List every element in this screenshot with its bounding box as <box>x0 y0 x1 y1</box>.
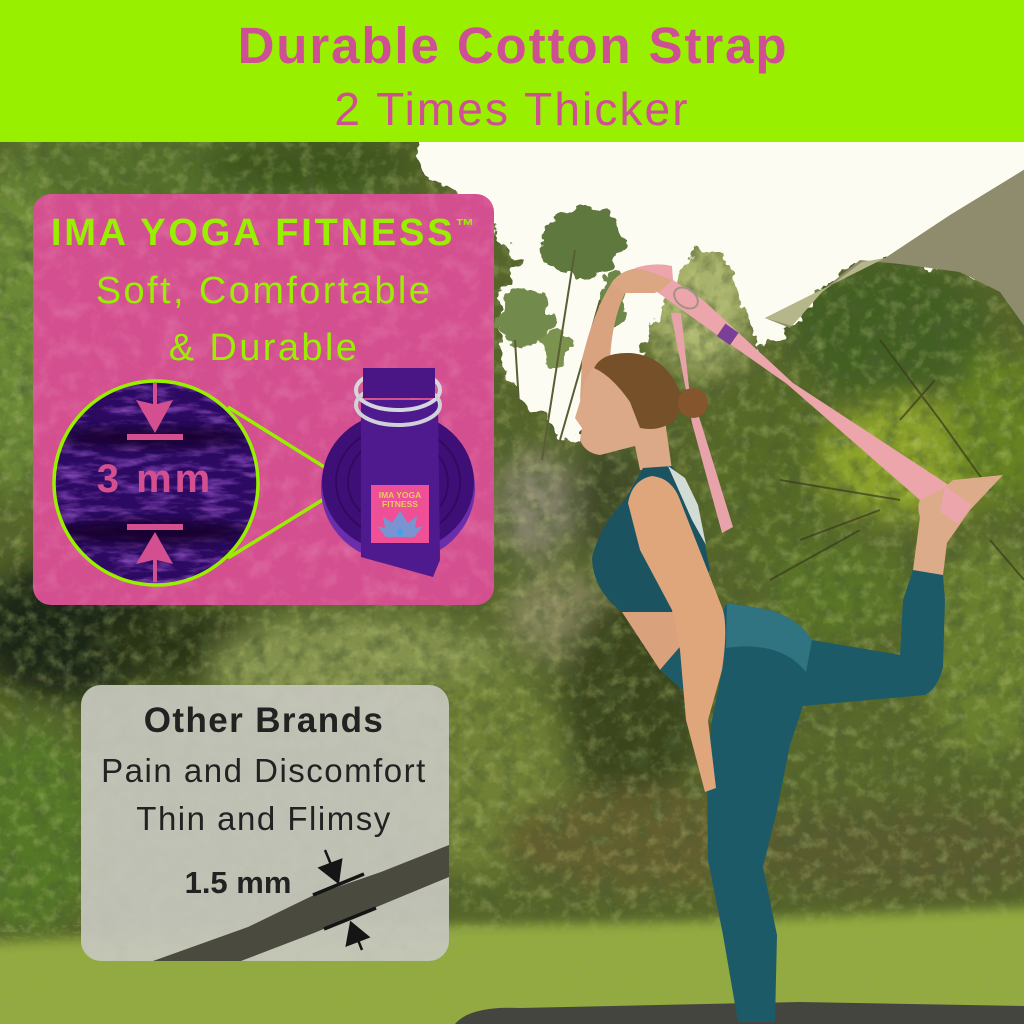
title: Durable Cotton Strap <box>238 17 788 74</box>
mountain <box>765 166 1024 334</box>
grass <box>0 905 1024 1024</box>
hair bun <box>678 388 708 418</box>
panel heading: IMA YOGA FITNESS <box>51 212 455 254</box>
panel text: Soft, Comfortable <box>96 270 432 312</box>
arm <box>628 476 725 792</box>
leggings <box>707 570 945 1022</box>
purple strap tag <box>717 324 739 345</box>
header banner <box>0 0 1024 142</box>
panel text: Pain and Discomfort <box>101 752 427 789</box>
panel heading: ™ <box>455 216 477 237</box>
panel text <box>101 752 427 837</box>
woman doing yoga with strap <box>575 264 1003 1022</box>
product label <box>371 485 429 543</box>
panel text <box>96 270 432 369</box>
face and neck <box>575 362 672 470</box>
sports top <box>592 466 710 612</box>
tree left of woman <box>499 207 624 370</box>
panel text: & Durable <box>169 327 359 369</box>
hand on strap <box>612 269 672 293</box>
thickness label: 1.5 mm <box>185 865 291 900</box>
strap band <box>635 264 967 523</box>
hair <box>594 353 690 429</box>
strap loop over foot <box>940 486 972 524</box>
strap tail <box>671 313 733 533</box>
rolled purple strap product <box>321 368 475 577</box>
strap thickness lens <box>50 380 259 586</box>
product label: FITNESS <box>382 499 418 509</box>
thickness label: 3 mm <box>97 457 213 501</box>
leggings side <box>660 642 688 695</box>
bottom marker <box>324 908 376 950</box>
foot and shin <box>913 475 1003 575</box>
panel heading: Other Brands <box>144 701 384 740</box>
top arrow <box>127 383 183 440</box>
panel text: Thin and Flimsy <box>136 800 392 837</box>
bottom arrow <box>127 524 183 582</box>
D-ring on strap <box>670 283 702 313</box>
raised arm <box>580 268 672 400</box>
panel: IMA Yoga Fitness <box>33 194 494 605</box>
top marker <box>313 850 364 895</box>
panel: Other Brands <box>81 685 449 961</box>
sky <box>412 130 1024 440</box>
branches <box>770 340 1024 580</box>
grass texture <box>0 925 1024 1024</box>
hazy slope <box>765 258 885 326</box>
thin strap <box>153 845 449 961</box>
sunlit back of top <box>668 466 706 545</box>
yoga mat <box>455 1002 1024 1024</box>
product label: IMA YOGA <box>379 490 421 500</box>
foliage texture <box>0 142 1024 932</box>
midriff <box>622 612 686 670</box>
subtitle: 2 Times Thicker <box>334 83 690 135</box>
callout pointer lines <box>228 407 350 558</box>
tree trunks <box>515 250 600 460</box>
leggings hip highlight <box>726 603 812 672</box>
